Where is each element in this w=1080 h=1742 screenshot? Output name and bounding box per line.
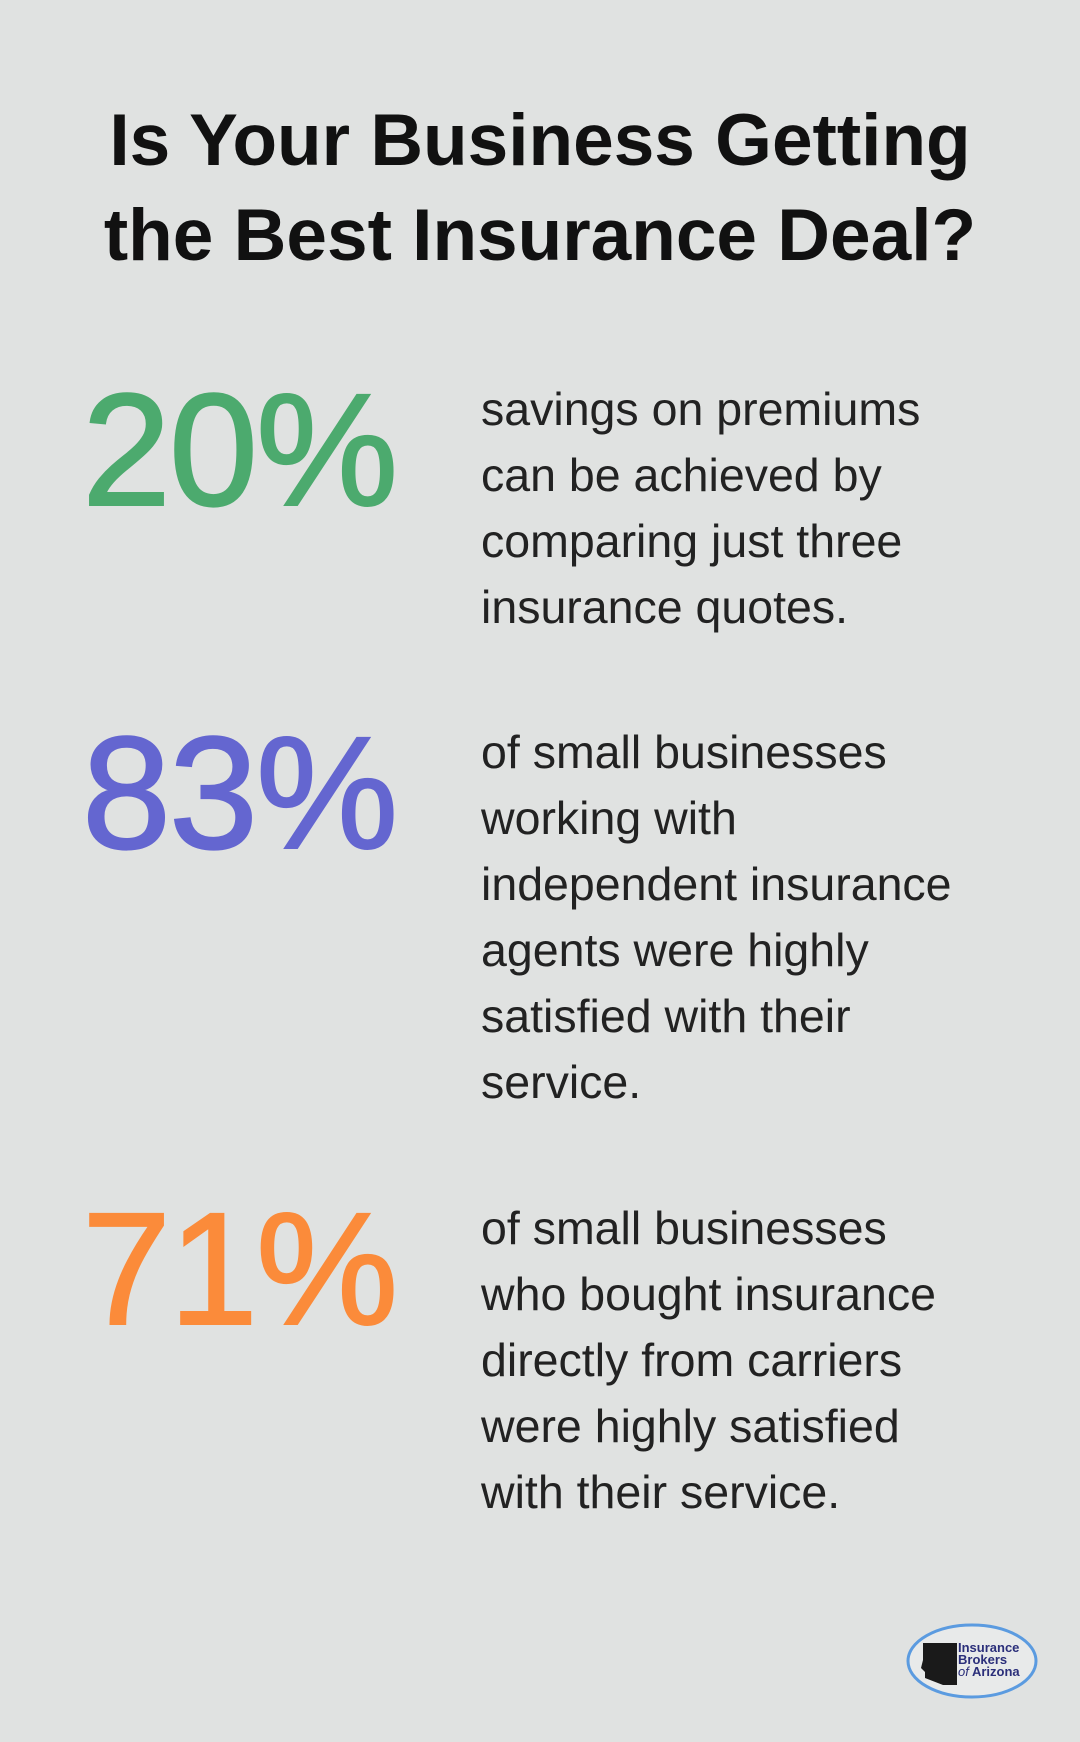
text: 20% description: comparing just three [481, 515, 902, 567]
logo: of Arizona [958, 1664, 1020, 1679]
text: 20% description [481, 383, 920, 633]
stat: 20%: 20% [82, 360, 396, 539]
text: 83% description [481, 726, 952, 1108]
title: Is Your Business Getting [109, 100, 971, 181]
text: 20% description: insurance quotes. [481, 581, 848, 633]
text: 83% description: satisfied with their [481, 990, 851, 1042]
text: 71% description: were highly satisfied [481, 1400, 900, 1452]
text: 83% description: agents were highly [481, 924, 869, 976]
text: 20% description: can be achieved by [481, 449, 882, 501]
stat: 83%: 83% [82, 703, 396, 882]
stat: 71%: 71% [82, 1179, 396, 1358]
title: the Best Insurance Deal? [104, 195, 976, 276]
text: 71% description [481, 1202, 936, 1518]
text: 83% description: independent insurance [481, 858, 952, 910]
logo [906, 1624, 1038, 1698]
text: 71% description: who bought insurance [481, 1268, 936, 1320]
logo: Insurance [958, 1640, 1019, 1655]
logo: Brokers [958, 1652, 1007, 1667]
text: 20% description: savings on premiums [481, 383, 920, 435]
text: 83% description: working with [481, 792, 737, 844]
text: 83% description: service. [481, 1056, 641, 1108]
text: 71% description: of small businesses [481, 1202, 887, 1254]
text: 71% description: with their service. [481, 1466, 840, 1518]
text: 83% description: of small businesses [481, 726, 887, 778]
text: 71% description: directly from carriers [481, 1334, 902, 1386]
title [104, 100, 976, 276]
